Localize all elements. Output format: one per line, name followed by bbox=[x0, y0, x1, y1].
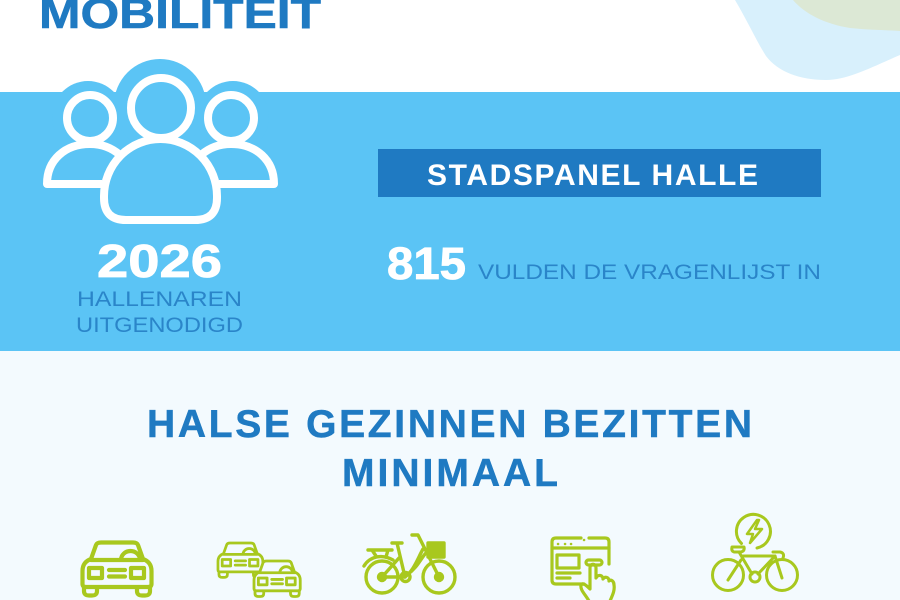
stat: 815 responses: 815 bbox=[387, 238, 466, 289]
banner: stadspanel halle bbox=[378, 149, 821, 197]
panel: ownership bbox=[0, 351, 900, 600]
banner: stadspanel halle: STADSPANEL HALLE bbox=[427, 159, 758, 192]
icon: electric bicycle bbox=[712, 514, 798, 590]
heading bbox=[147, 403, 752, 495]
icon: web page with clicking hand bbox=[552, 538, 614, 600]
stat: 2026 invited bbox=[76, 235, 243, 337]
icon: bicycle with basket bbox=[364, 535, 455, 593]
stat: 815 responses bbox=[387, 238, 821, 289]
stat: 815 responses: VULDEN DE VRAGENLIJST IN bbox=[478, 261, 821, 284]
icon: two cars bbox=[218, 543, 300, 597]
icon: group of people bbox=[47, 59, 274, 220]
panel: stadspanel band bbox=[0, 59, 900, 351]
icon: car bbox=[82, 542, 152, 596]
decorative blob: green bbox=[793, 0, 900, 31]
decorative blob: light blue bbox=[735, 0, 900, 80]
stat: 2026 invited: HALLENAREN bbox=[77, 288, 242, 311]
stat: 2026 invited: 2026 bbox=[97, 235, 222, 287]
heading: MINIMAAL bbox=[342, 452, 558, 495]
heading: HALSE GEZINNEN BEZITTEN bbox=[147, 403, 752, 446]
stat: 2026 invited: UITGENODIGD bbox=[76, 314, 243, 337]
